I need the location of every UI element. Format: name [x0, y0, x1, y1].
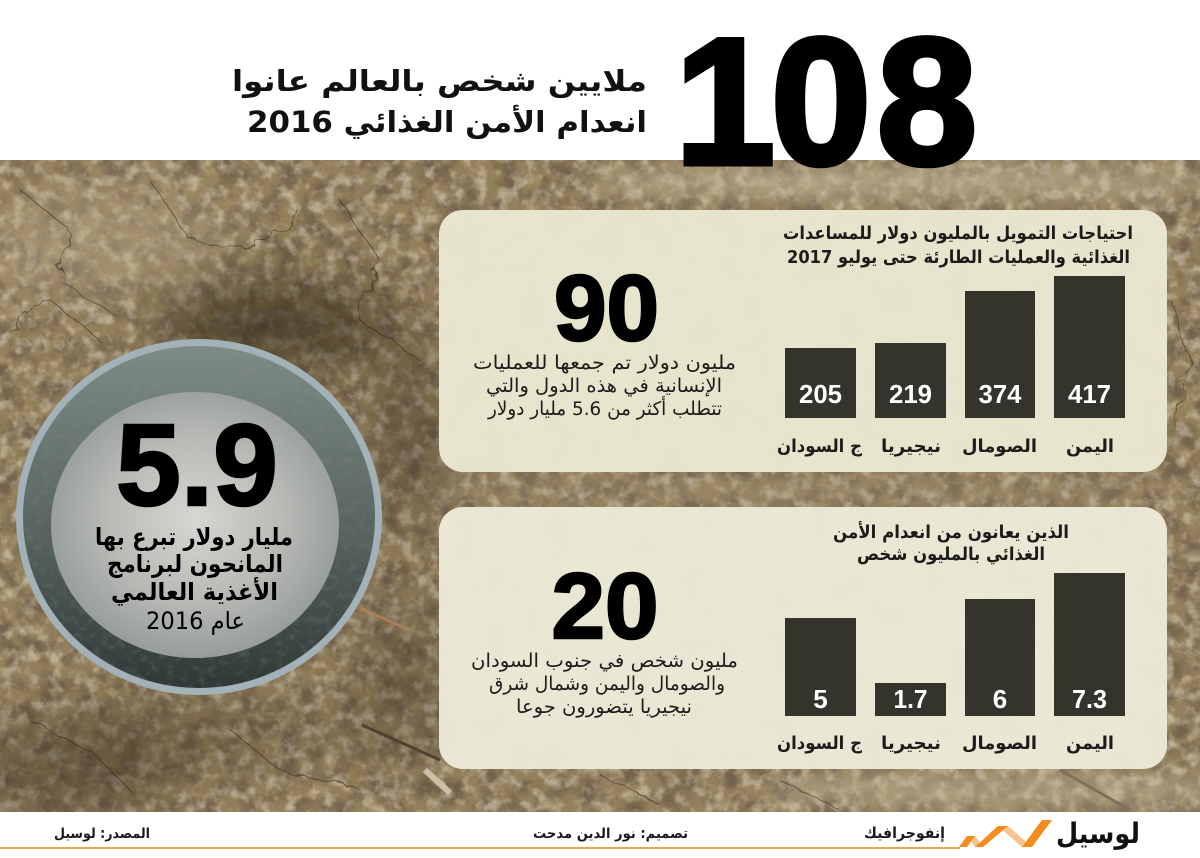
bar chart: funding by country: 205 [799, 379, 842, 409]
title: انعدام الأمن الغذائي 2016 [247, 104, 647, 139]
bowl caption: الأغذية العالمي [111, 577, 278, 606]
bar chart: funding by country: 417 [1068, 379, 1111, 409]
infographic label: إنفوجرافيك [864, 824, 945, 842]
chart title: funding needs: احتياجات التمويل بالمليون دولار للمساعدات [783, 223, 1133, 244]
bowl caption: المانحون لبرنامج [107, 550, 283, 578]
chart title: funding needs: الغذائية والعمليات الطارئة حتى يوليو 2017 [787, 247, 1130, 268]
chart title: food insecure people [833, 521, 1069, 565]
title [232, 64, 647, 139]
bar chart: people by country: ج السودان [777, 733, 862, 754]
text block: funds raised: تتطلب أكثر من 5.6 مليار دولار [487, 396, 722, 420]
icon: empty metal bowl [16, 339, 382, 695]
bowl caption: مليار دولار تبرع بها [95, 523, 293, 551]
chart title: funding needs [783, 223, 1133, 268]
bar chart: funding by country: 219 [889, 379, 932, 409]
bar chart: funding by country: 374 [978, 379, 1022, 409]
headline number 108 [675, 1, 977, 203]
chart title: food insecure people: الذين يعانون من انعدام الأمن [833, 521, 1069, 543]
logo wordmark: لوسيل [1056, 817, 1140, 850]
bar chart: people by country: 5 [813, 684, 828, 714]
text block: people starving: والصومال واليمن وشمال شرق [489, 673, 725, 695]
bar chart: funding by country: اليمن [1066, 436, 1114, 457]
text block: people starving [471, 650, 738, 718]
footer [0, 812, 1200, 858]
headline number 108: 0 [771, 1, 871, 203]
bar chart: people by country: نيجيريا [881, 733, 941, 754]
bar chart: people by country: اليمن [1066, 733, 1114, 754]
statistic 90: 90 [554, 256, 659, 360]
source credit: المصدر: لوسيل [54, 826, 150, 842]
bar chart: people by country: 6 [993, 684, 1007, 714]
bar chart: funding by country: الصومال [962, 436, 1037, 457]
text block: funds raised: الإنسانية في هذه الدول والتي [486, 375, 722, 397]
headline number 108: 1 [675, 1, 775, 203]
panel: funding needs [439, 210, 1167, 472]
bar chart: funding by country: نيجيريا [881, 436, 941, 457]
title: ملايين شخص بالعالم عانوا [232, 64, 647, 98]
bowl caption [95, 523, 293, 635]
text block: people starving: مليون شخص في جنوب السودان [471, 650, 738, 672]
text block: people starving: نيجيريا يتضورون جوعا [516, 696, 692, 718]
bowl inner wall [23, 346, 375, 688]
logo: orange zigzag [959, 820, 1052, 847]
bar chart: funding by country: ج السودان [777, 436, 862, 457]
text block: funds raised: مليون دولار تم جمعها للعمليات [473, 352, 736, 374]
panel: food insecurity [439, 507, 1167, 769]
text block: funds raised [473, 352, 736, 420]
chart title: food insecure people: الغذائي بالمليون شخص [857, 544, 1045, 565]
bar chart: people by country: الصومال [962, 733, 1037, 754]
statistic 5.9: 5.9 [116, 400, 278, 530]
bar chart: people by country [777, 573, 1125, 754]
bar chart: people by country: 1.7 [894, 684, 928, 714]
bowl rim [16, 339, 382, 695]
bar chart: funding by country [777, 276, 1125, 457]
statistic 20: 20 [552, 554, 658, 658]
bowl caption: عام 2016 [146, 607, 245, 635]
designer credit: تصميم: نور الدين مدحت [533, 826, 688, 842]
background photo: cracked soil [0, 160, 1200, 812]
headline number 108: 8 [877, 1, 977, 203]
bowl base disc [51, 392, 339, 658]
bar chart: people by country: 7.3 [1072, 684, 1107, 714]
